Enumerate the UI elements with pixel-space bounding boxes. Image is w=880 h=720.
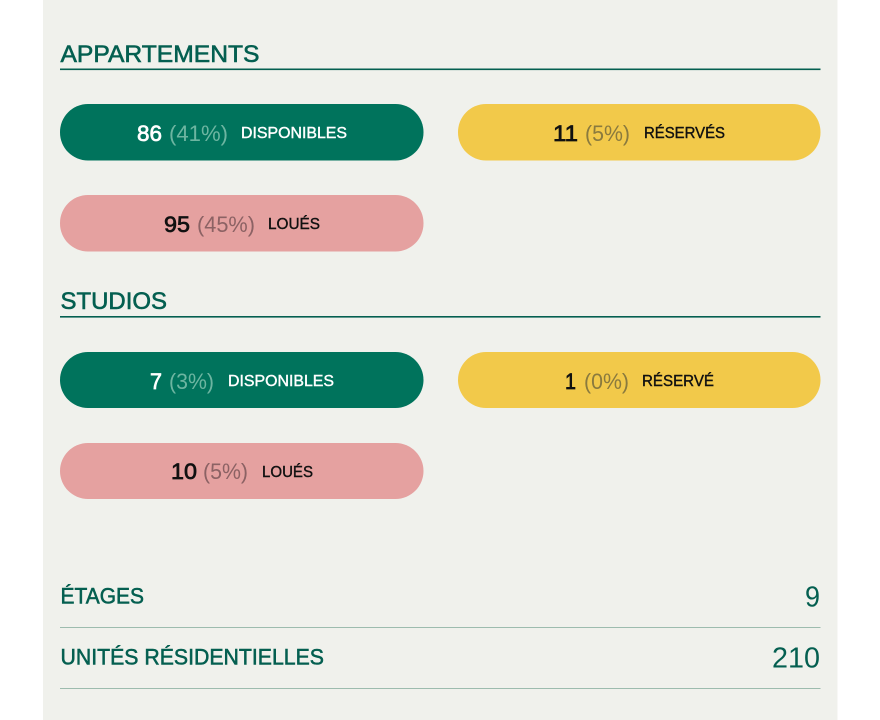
pill: appartements disponibles: 86: [137, 121, 162, 146]
pill: appartements réservés: RÉSERVÉS: [644, 123, 725, 142]
pill: studios loués: 10: [171, 459, 197, 484]
pill: studios disponibles: (3%): [169, 369, 214, 394]
stat row: étages: [60, 582, 820, 628]
pill: appartements réservés: (5%): [585, 121, 630, 146]
stat row: unités résidentielles: [60, 642, 820, 689]
pill: studios disponibles: DISPONIBLES: [228, 373, 334, 390]
pill: appartements réservés: 11: [553, 121, 578, 146]
pill: studios loués: LOUÉS: [262, 462, 313, 481]
pill: studios réservé: [458, 352, 820, 408]
pill: appartements disponibles: (41%): [169, 121, 228, 146]
stat row: étages: 9: [805, 582, 820, 614]
pill: studios réservé: 1: [565, 369, 576, 394]
stat row: étages: ÉTAGES: [60, 584, 144, 608]
pill: studios loués: (5%): [203, 459, 248, 484]
pill: appartements loués: (45%): [197, 212, 255, 237]
pill: appartements loués: LOUÉS: [268, 214, 320, 233]
heading: studios: STUDIOS: [60, 288, 167, 315]
section: appartements: [60, 41, 820, 252]
stat row: unités résidentielles: UNITÉS RÉSIDENTIELLES: [60, 644, 324, 670]
heading: appartements: APPARTEMENTS: [60, 41, 260, 68]
pill: appartements réservés: [458, 104, 820, 160]
pill: studios loués: [60, 443, 424, 499]
pill: studios réservé: (0%): [584, 369, 629, 394]
pill: studios disponibles: 7: [150, 369, 162, 394]
section: studios: [60, 288, 820, 499]
pill: studios disponibles: [60, 352, 424, 408]
stat row: unités résidentielles: 210: [772, 642, 820, 674]
pill: appartements loués: 95: [164, 212, 190, 237]
pill: appartements disponibles: [60, 104, 424, 160]
pill: appartements disponibles: DISPONIBLES: [241, 125, 347, 142]
pill: studios réservé: RÉSERVÉ: [642, 371, 714, 390]
pill: appartements loués: [60, 195, 424, 252]
